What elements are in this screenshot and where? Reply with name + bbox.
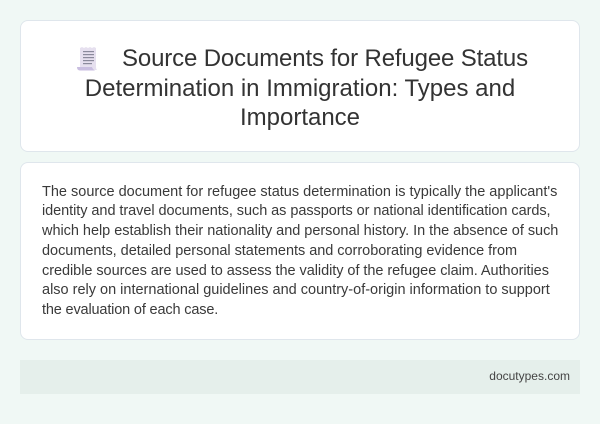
panel: description card: [20, 162, 580, 340]
text block: description: identity and travel documents, such as passports or national identification cards,: [42, 203, 550, 219]
title: Importance: [240, 104, 360, 131]
text block: description: documents, detailed personal statements and corroborating evidence from: [42, 243, 517, 259]
text block: description: credible sources are used to assess the validity of the refugee claim. Authorities: [42, 263, 549, 279]
text block: description: [42, 184, 558, 318]
icon: document scroll: [77, 47, 97, 70]
panel: title card: [20, 20, 580, 152]
title: Source Documents for Refugee Status: [122, 45, 528, 72]
footer text: source: docutypes.com: [489, 369, 570, 383]
text block: description: also rely on international guidelines and country-of-origin information to support: [42, 282, 550, 298]
text block: description: which help establish their nationality and personal history. In the absence of such: [42, 223, 558, 239]
title: Determination in Immigration: Types and: [85, 75, 515, 102]
text block: description: the evaluation of each case.: [42, 302, 218, 318]
footer bar: [20, 360, 580, 394]
title: [85, 45, 528, 131]
text block: description: The source document for refugee status determination is typically the applicant's: [42, 184, 557, 200]
